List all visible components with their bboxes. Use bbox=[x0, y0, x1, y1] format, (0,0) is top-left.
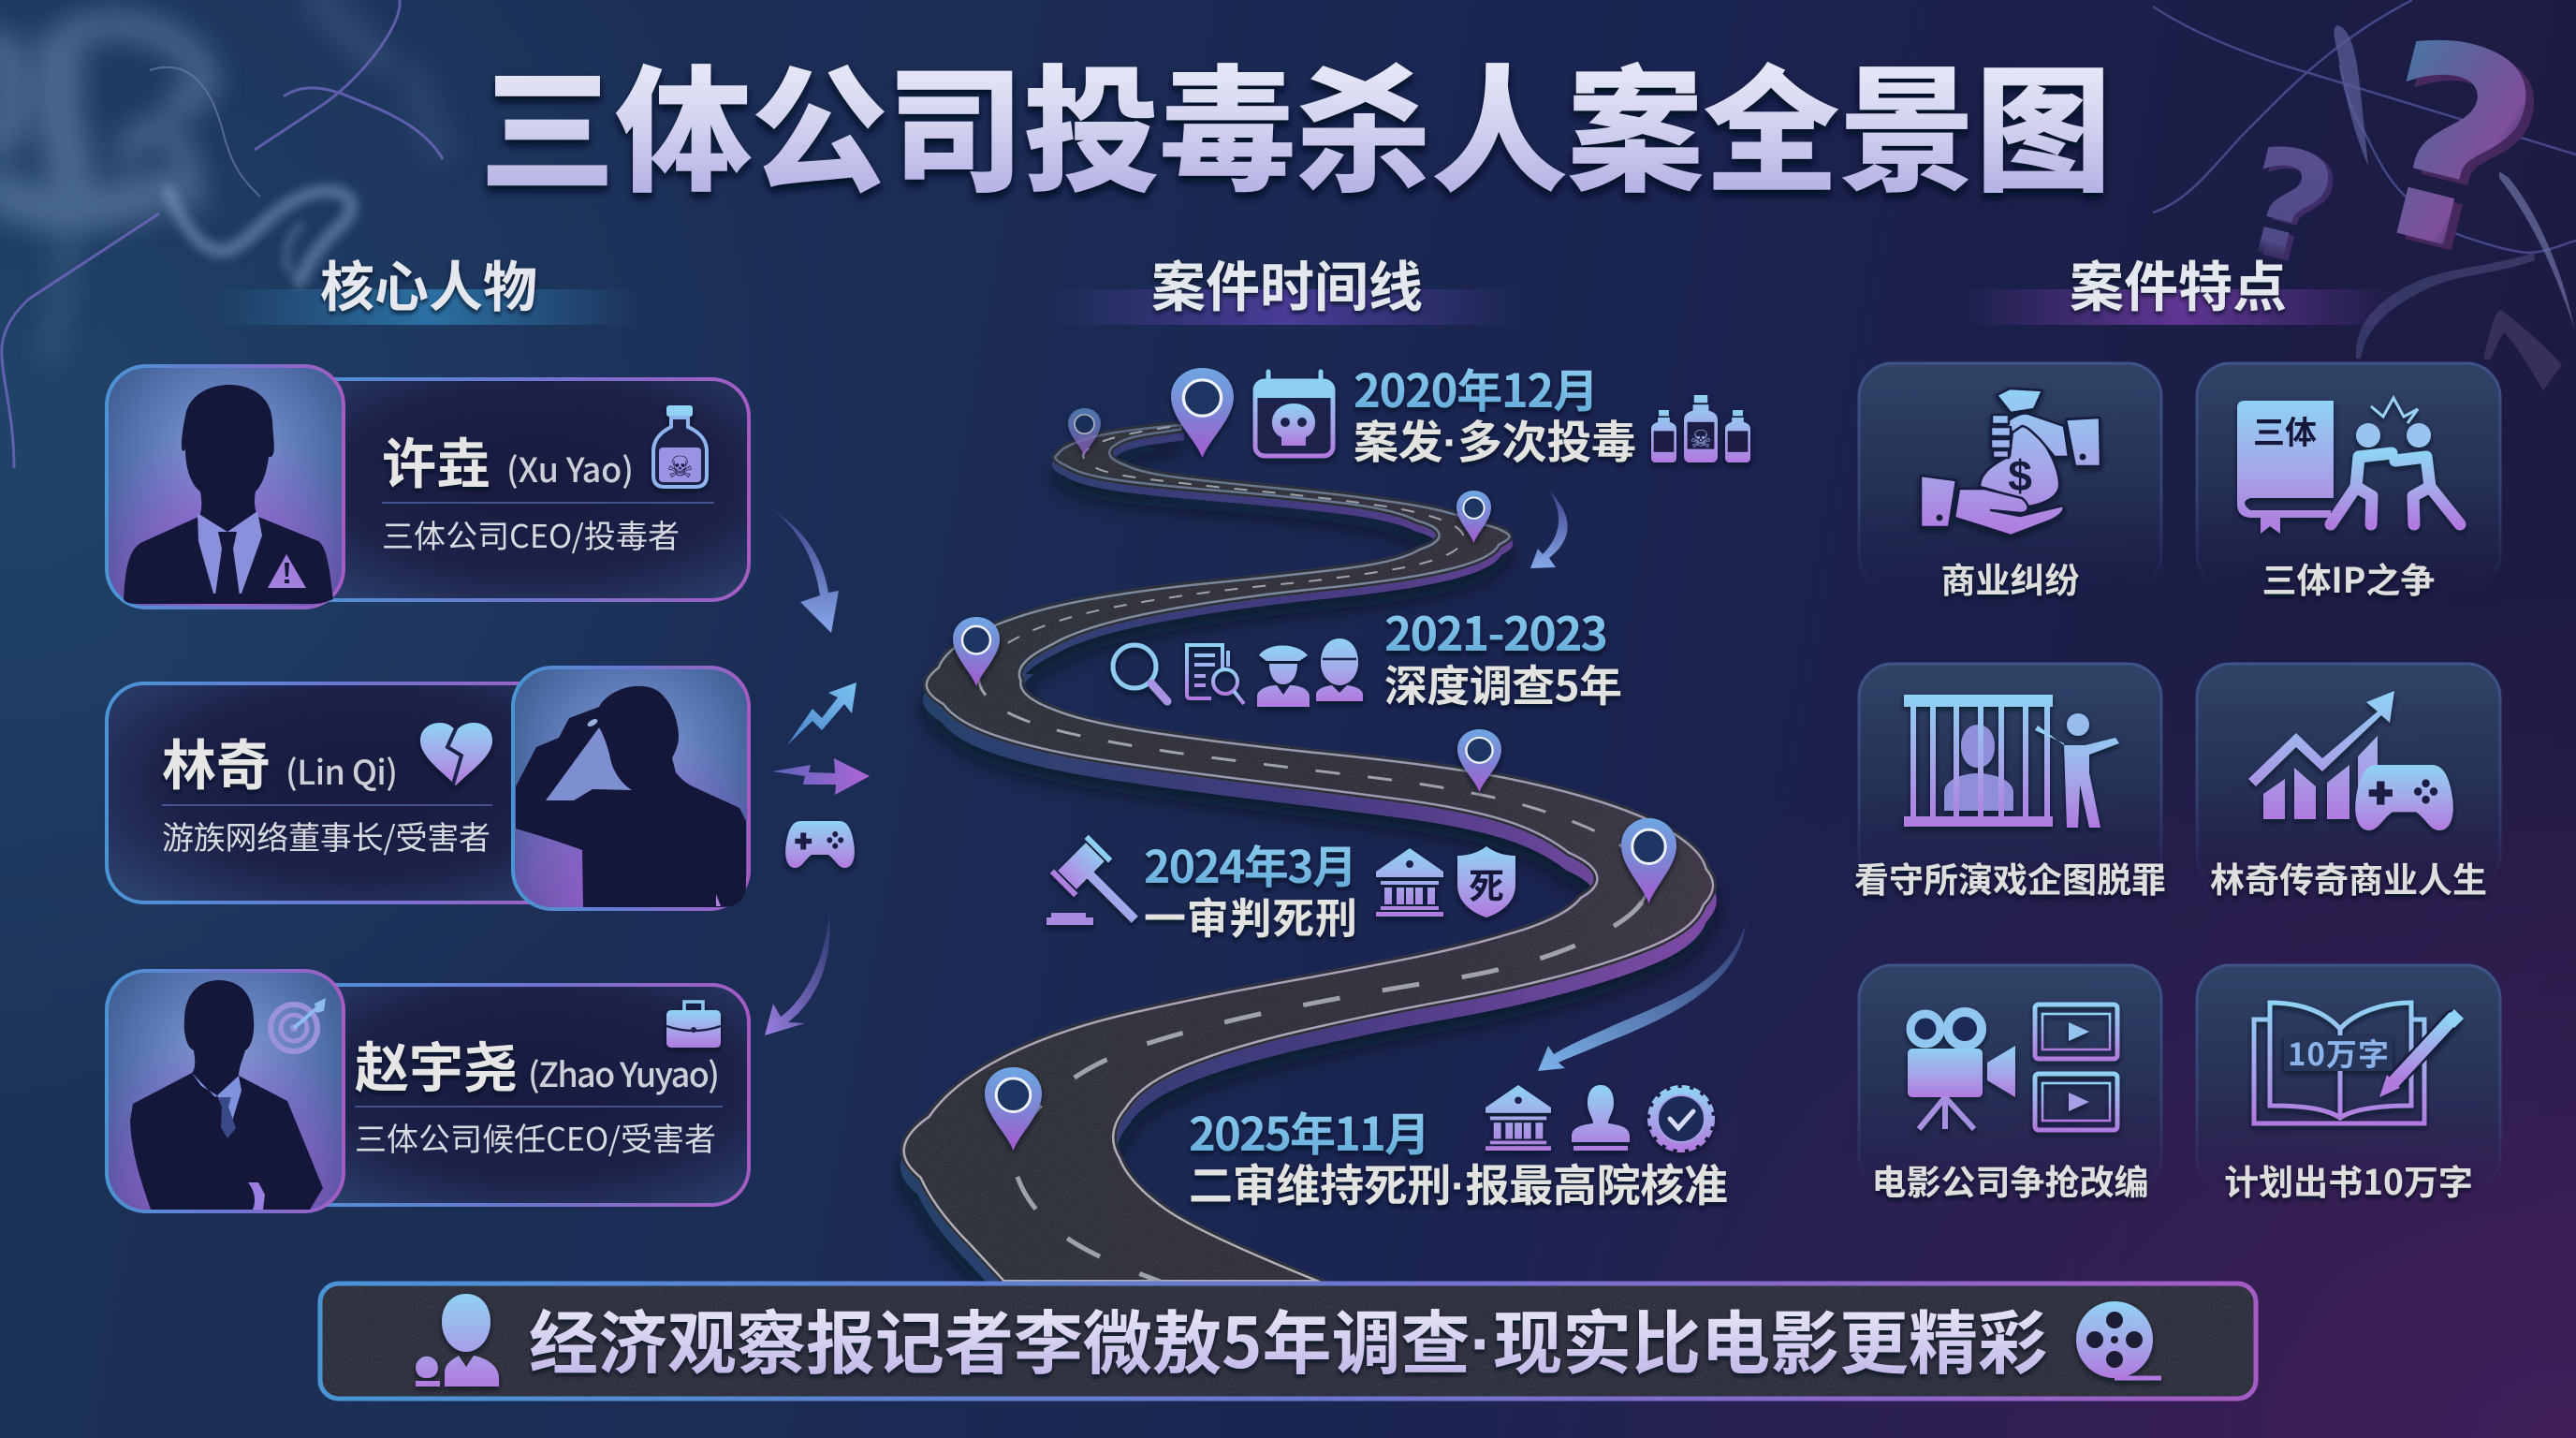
timeline stop 2025年11月: 二审维持死刑·报最高院核准 bbox=[1189, 1150, 1728, 1214]
icon: game controller bbox=[785, 821, 855, 868]
panel: person 许垚: 三体公司CEO/投毒者 bbox=[382, 511, 680, 557]
heading: 核心人物: 核心人物 bbox=[320, 243, 537, 322]
icon: magnifier bbox=[1113, 645, 1167, 701]
panel: person 许垚: 许垚 bbox=[382, 420, 490, 499]
icon: poison bottles: ☠ bbox=[1690, 426, 1712, 454]
arrow: curved arrow to 2025 bbox=[1538, 923, 1746, 1071]
arrow: rising zigzag bbox=[787, 682, 856, 745]
heading: 案件特点: 案件特点 bbox=[2070, 243, 2287, 322]
arrow: small curved arrow bbox=[1530, 492, 1568, 568]
panel: person 许垚: (Xu Yao) bbox=[506, 444, 634, 492]
arrow: right zigzag bbox=[772, 758, 870, 795]
icon: book and fighters bbox=[2237, 398, 2460, 534]
panel: feature 林奇传奇商业人生: 林奇传奇商业人生 bbox=[2210, 852, 2487, 902]
icon: broken heart bbox=[420, 723, 492, 785]
panel: feature 电影公司争抢改编: 电影公司争抢改编 bbox=[1872, 1154, 2149, 1205]
portrait: 许垚 silhouette bbox=[107, 366, 344, 608]
panel: person 赵宇尧 bbox=[107, 971, 749, 1211]
timeline stop 2024年3月: 一审判死刑 bbox=[1144, 885, 1357, 946]
panel: person 林奇: 林奇 bbox=[162, 722, 271, 800]
timeline stop 2021-2023 bbox=[1113, 597, 1622, 714]
heading: 案件时间线: 案件时间线 bbox=[1151, 243, 1423, 322]
panel: person 赵宇尧: (Zhao Yuyao) bbox=[528, 1049, 720, 1097]
panel: person 林奇: 游族网络董事长/受害者 bbox=[162, 813, 490, 858]
icon: stamp bbox=[1572, 1085, 1630, 1151]
decorative question marks: ? bbox=[2225, 112, 2349, 301]
timeline stop 2021-2023: 2021-2023 bbox=[1384, 597, 1608, 665]
icon: case file bbox=[1187, 645, 1244, 704]
icon: book and fighters: 三体 bbox=[2253, 407, 2317, 453]
panel: person 林奇 bbox=[107, 668, 749, 909]
heading: 核心人物 bbox=[213, 243, 640, 325]
decorative question marks bbox=[2153, 0, 2576, 390]
icon: film camera bbox=[1908, 1012, 2015, 1129]
panel: person 许垚 bbox=[107, 366, 749, 608]
panel: feature 商业纠纷: 商业纠纷 bbox=[1941, 552, 2080, 603]
panel: feature 三体IP之争: 三体IP之争 bbox=[2262, 552, 2435, 603]
icon: journalist bbox=[416, 1294, 499, 1387]
heading: 案件特点 bbox=[1962, 243, 2397, 325]
icon: film reel bbox=[2076, 1301, 2161, 1378]
icon: jail and person bbox=[1904, 695, 2119, 828]
icon: poison bottles bbox=[1651, 395, 1750, 462]
icon: death sentence shield bbox=[1457, 846, 1515, 917]
arrow: 许垚 to 林奇 bbox=[772, 509, 839, 633]
timeline stop 2025年11月 bbox=[1189, 1085, 1728, 1214]
panel: feature 商业纠纷 bbox=[1859, 363, 2161, 603]
timeline stop 2025年11月: 2025年11月 bbox=[1189, 1098, 1430, 1165]
panel: feature 电影公司争抢改编 bbox=[1859, 965, 2161, 1205]
icon: approval badge bbox=[1650, 1088, 1712, 1150]
timeline stop 2020年12月 bbox=[1255, 355, 1750, 471]
banner: bottom conclusion bbox=[320, 1284, 2256, 1399]
timeline stop 2024年3月: 2024年3月 bbox=[1144, 830, 1357, 896]
timeline stop 2021-2023: 深度调查5年 bbox=[1384, 653, 1622, 714]
icon: rising chart and controller bbox=[2248, 691, 2453, 830]
icon: supreme court bbox=[1486, 1085, 1551, 1151]
portrait: 林奇 silhouette bbox=[513, 668, 749, 909]
panel: feature 三体IP之争 bbox=[2197, 363, 2500, 603]
panel: feature 计划出书10万字 bbox=[2197, 965, 2500, 1205]
icon: briefcase bbox=[666, 1002, 721, 1048]
panel: person 林奇: (Lin Qi) bbox=[285, 746, 398, 795]
icon: investigator bbox=[1316, 638, 1363, 701]
background smoke bbox=[0, 0, 443, 468]
icon: money bag and hands: $ bbox=[2008, 451, 2032, 500]
icon: target bbox=[271, 998, 326, 1051]
icon: police officer bbox=[1257, 646, 1310, 707]
title: 三体公司投毒杀人案全景图 bbox=[479, 22, 2112, 220]
icon: courthouse bbox=[1376, 848, 1443, 917]
panel: feature 看守所演戏企图脱罪 bbox=[1854, 664, 2166, 902]
panel: feature 计划出书10万字: 计划出书10万字 bbox=[2224, 1154, 2473, 1205]
banner: bottom conclusion: 经济观察报记者李微敖5年调查·现实比电影更精彩 bbox=[529, 1288, 2047, 1388]
timeline stop 2024年3月 bbox=[1046, 830, 1515, 946]
panel: person 赵宇尧: 赵宇尧 bbox=[355, 1024, 518, 1103]
icon: open book and pen bbox=[2254, 1003, 2464, 1123]
heading: 案件时间线 bbox=[1051, 243, 1519, 325]
icon: death sentence shield: 死 bbox=[1469, 858, 1504, 909]
portrait: 赵宇尧 silhouette bbox=[107, 971, 344, 1211]
icon: film strips bbox=[2035, 1005, 2117, 1130]
panel: feature 看守所演戏企图脱罪: 看守所演戏企图脱罪 bbox=[1854, 852, 2166, 902]
timeline stop 2020年12月: 案发·多次投毒 bbox=[1354, 405, 1636, 471]
icon: warning triangle bbox=[268, 554, 306, 588]
panel: person 赵宇尧: 三体公司候任CEO/受害者 bbox=[355, 1114, 716, 1160]
arrow: 林奇 to 赵宇尧 bbox=[765, 914, 830, 1035]
icon: open book and pen: 10万字 bbox=[2288, 1030, 2389, 1075]
icon: poison bottle: ☠ bbox=[666, 449, 694, 485]
icon: calendar skull bbox=[1255, 372, 1333, 456]
decorative question marks: ? bbox=[2230, 116, 2355, 304]
timeline stop 2020年12月: 2020年12月 bbox=[1354, 355, 1599, 421]
panel: feature 林奇传奇商业人生 bbox=[2197, 664, 2500, 902]
icon: poison bottle bbox=[653, 405, 707, 487]
icon: gavel bbox=[1046, 835, 1154, 939]
timeline pins bbox=[953, 368, 1676, 1151]
icon: money bag and hands bbox=[1921, 389, 2100, 536]
timeline road bbox=[900, 421, 1717, 1299]
